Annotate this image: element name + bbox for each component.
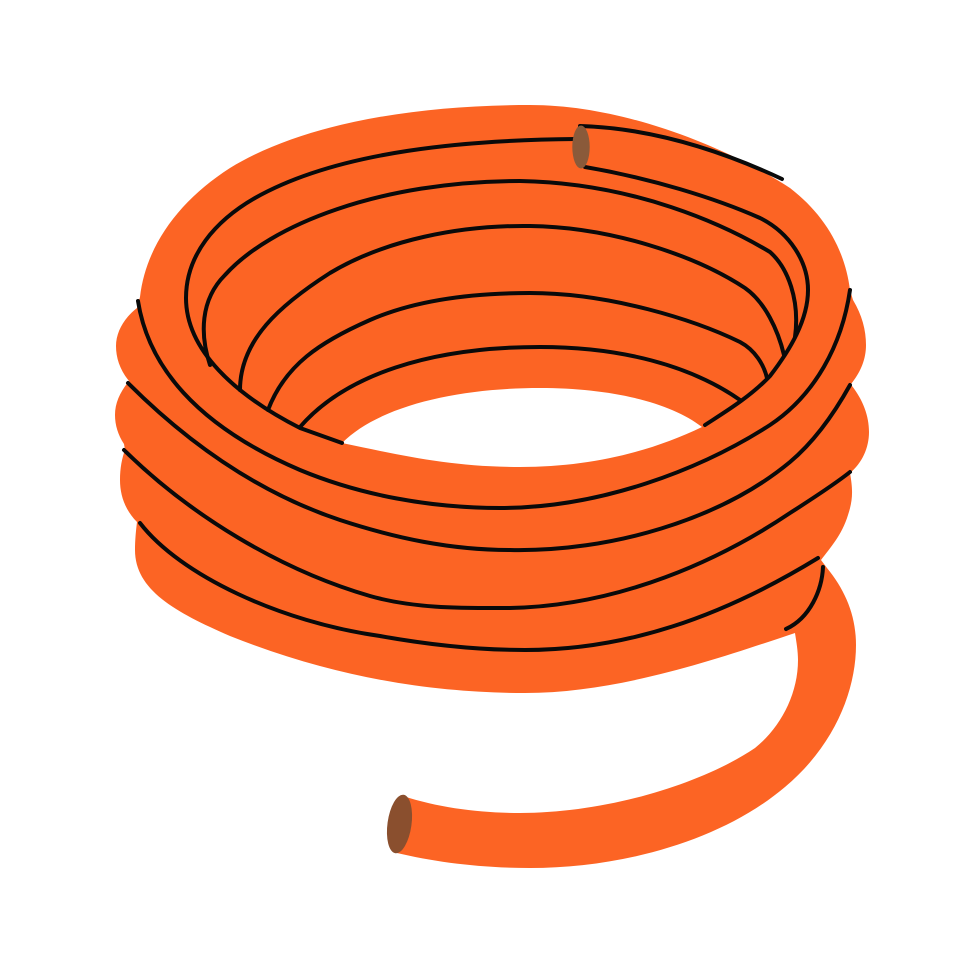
- hose end: bottom cut: [384, 793, 415, 855]
- hose contour lines: [124, 126, 850, 650]
- hose coil body: [115, 105, 869, 868]
- hose end: top cut: [572, 126, 590, 168]
